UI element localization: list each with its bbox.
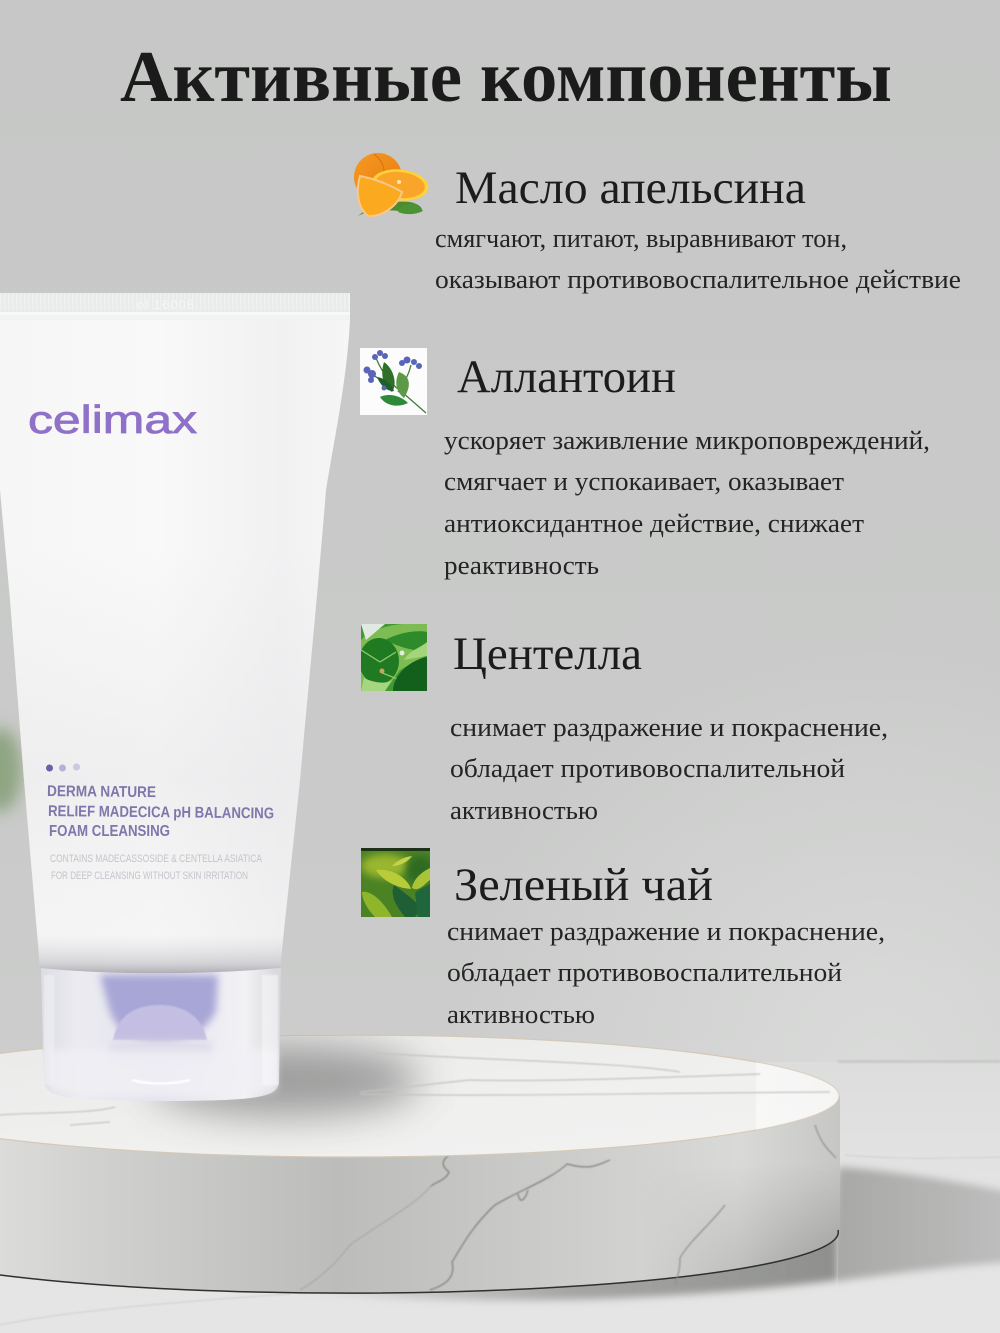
- description: [444, 426, 930, 580]
- marble veins on side: [300, 1125, 836, 1290]
- ingredient: orange oil: [435, 162, 961, 294]
- podium top: [0, 1035, 839, 1157]
- tube cap: [41, 968, 281, 1101]
- icon: orange: [354, 153, 430, 216]
- product name: FOAM CLEANSING: [49, 823, 170, 840]
- description: [435, 224, 961, 294]
- icon: centella leaves: [359, 623, 427, 691]
- heading: Центелла: [453, 628, 642, 680]
- description: ускоряет заживление микроповреждений,: [444, 426, 930, 455]
- description: активностью: [447, 1000, 595, 1029]
- product description: CONTAINS MADECASSOSIDE & CENTELLA ASIATICA: [50, 853, 263, 865]
- product description: [50, 853, 263, 882]
- product tube: [0, 293, 350, 1101]
- description: обладает противовоспалительной: [450, 754, 845, 783]
- marble floor: [0, 1060, 1000, 1333]
- product name: [47, 783, 274, 840]
- description: снимает раздражение и покраснение,: [450, 713, 888, 742]
- podium side: [0, 1096, 840, 1293]
- description: [450, 713, 888, 825]
- podium: [0, 1035, 840, 1293]
- description: активностью: [450, 796, 598, 825]
- tube crimp: ol 16008: [137, 297, 195, 312]
- product name: RELIEF MADECICA pH BALANCING: [48, 803, 274, 822]
- icon: green tea: [361, 848, 434, 917]
- title: Активные компоненты: [120, 36, 892, 117]
- description: обладает противовоспалительной: [447, 958, 842, 987]
- marble veins on top: [0, 1053, 830, 1125]
- description: снимает раздражение и покраснение,: [447, 917, 885, 946]
- description: антиоксидантное действие, снижает: [444, 509, 864, 538]
- icon: comfrey flower: [360, 348, 427, 415]
- product description: FOR DEEP CLEANSING WITHOUT SKIN IRRITATION: [51, 870, 248, 882]
- brand logo: celimax: [28, 399, 198, 442]
- tube body: [0, 320, 350, 973]
- ingredient: green tea: [447, 859, 885, 1029]
- ingredient: allantoin: [444, 351, 930, 580]
- description: смягчают, питают, выравнивают тон,: [435, 224, 847, 253]
- description: реактивность: [444, 551, 599, 580]
- heading: Масло апельсина: [455, 162, 806, 214]
- ingredient: centella: [450, 628, 888, 825]
- description: оказывают противовоспалительное действие: [435, 265, 961, 294]
- description: [447, 917, 885, 1029]
- tube crimp: [0, 293, 350, 320]
- description: смягчает и успокаивает, оказывает: [444, 467, 844, 496]
- product name: DERMA NATURE: [47, 783, 156, 801]
- heading: Зеленый чай: [454, 859, 713, 911]
- heading: Аллантоин: [457, 351, 676, 403]
- tube dots: [46, 764, 80, 772]
